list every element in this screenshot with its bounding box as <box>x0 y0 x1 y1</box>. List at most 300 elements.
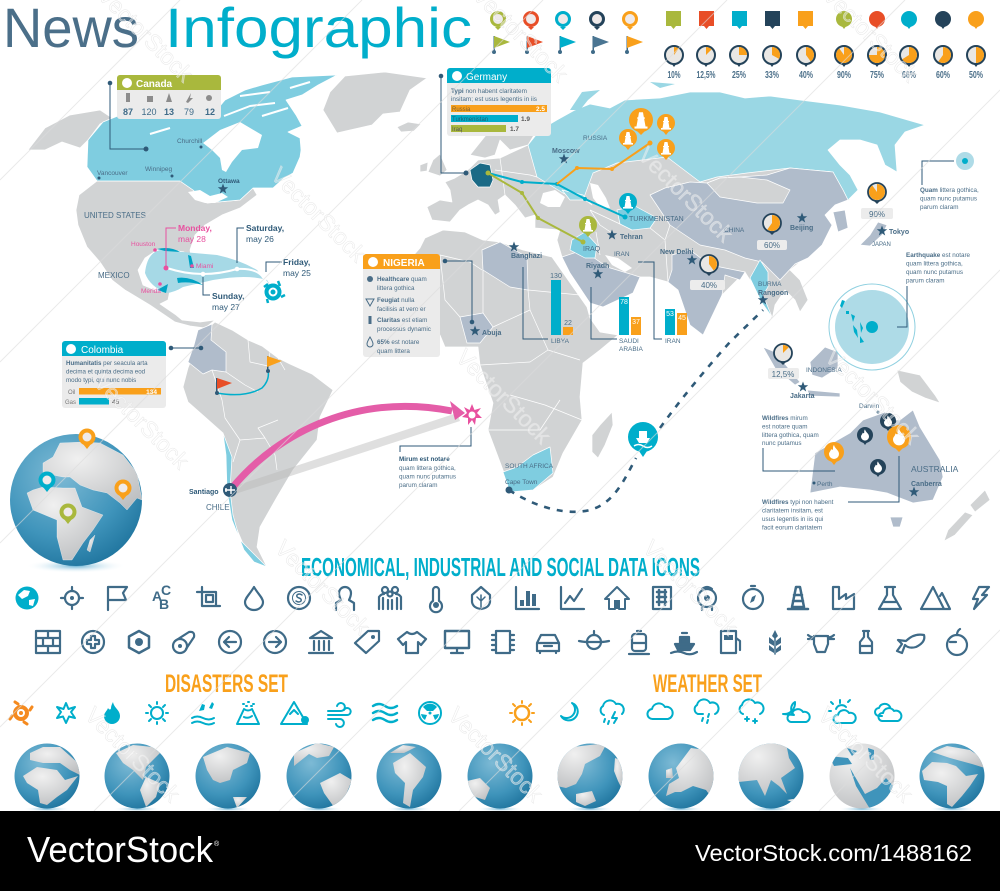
map labels: Rangoon <box>758 290 788 297</box>
Monday marker <box>164 223 212 270</box>
callout: wildfires south: usus legentis in iis qui <box>762 516 823 523</box>
callout: Canada <box>108 75 221 152</box>
icon: snow cloud <box>740 699 764 723</box>
wildfire markers <box>824 413 911 477</box>
callout: wildfires north: Wildfires mirum <box>762 415 808 422</box>
country: Iraq <box>570 232 597 258</box>
SE Asia islands <box>763 347 840 397</box>
callout: Mirum: parum claram <box>399 482 438 489</box>
icon: bank <box>309 631 333 653</box>
grey shadow <box>232 413 460 495</box>
earthquake zone <box>829 252 971 370</box>
icon: flask <box>879 587 901 609</box>
chart: Iran: 53 <box>666 311 674 318</box>
icon: house <box>605 587 629 609</box>
chart: Libya: 130 <box>550 273 562 280</box>
map labels: AUSTRALIA <box>911 464 959 474</box>
callout: Quam: Quam littera gothica, <box>920 187 979 194</box>
callout: Nigeria <box>363 254 474 357</box>
icon: rain cloud <box>695 699 719 723</box>
watermark: VectorStock <box>270 535 376 640</box>
pin 12.5 percent Sumatra: 12,5% <box>772 370 794 379</box>
percentage labels: 25% <box>732 70 746 81</box>
explosion star <box>462 404 482 425</box>
icon: apple <box>947 629 967 655</box>
map labels: Moscow <box>552 148 580 155</box>
icon: volcano <box>237 702 259 724</box>
country: Europe and Asia <box>427 130 850 335</box>
map labels: Tehran <box>620 234 643 241</box>
icon: flag <box>108 587 127 610</box>
callout: wildfires south <box>762 456 899 532</box>
Sunday marker: Sunday, <box>212 291 244 301</box>
heading: weather set: WEATHER SET <box>653 670 762 698</box>
icon: office building <box>653 587 671 609</box>
earthquake note: quam nunc putamus <box>906 269 963 276</box>
icon row 1 <box>16 582 989 612</box>
callout: wildfires south: claritatem insitam, est <box>762 508 823 514</box>
percentage labels: 75% <box>870 70 884 81</box>
chart: Saudi Arabia <box>591 287 644 353</box>
icon: letters <box>152 582 171 612</box>
chart: Saudi Arabia: 37 <box>632 319 640 326</box>
icon: price tag <box>355 631 379 653</box>
icon: fuel station <box>721 631 740 653</box>
map labels: UNITED STATES <box>84 211 146 220</box>
icon: two clouds <box>875 704 901 721</box>
globe row <box>14 743 985 812</box>
icon: pipe valve <box>579 631 609 649</box>
icon: letters: B <box>159 596 169 612</box>
icon: hex nut <box>129 631 149 653</box>
icon: lightning <box>973 587 989 609</box>
landmass: Greenland <box>323 72 427 133</box>
footer bar: ® <box>214 840 220 848</box>
hurricane icon <box>264 281 285 303</box>
callout: Quam: quam nunc putamus <box>920 196 977 202</box>
storm cities <box>131 241 213 295</box>
callout: wildfires south: facit eorum claritatem <box>762 524 822 532</box>
percentage labels: 40% <box>799 70 813 81</box>
callout: Germany: Germany <box>466 72 507 83</box>
callout: Germany: Russia <box>452 107 471 113</box>
icon: t-shirt <box>398 632 426 653</box>
percentage labels: 50% <box>969 70 983 81</box>
globe pin orange north <box>78 428 96 449</box>
globe: Central Americas <box>286 743 352 812</box>
callout: Nigeria: quam littera <box>377 348 410 355</box>
dashed sea route <box>506 310 763 512</box>
callout: wildfires north: est notare quam <box>762 424 808 430</box>
icon: crop <box>197 587 220 606</box>
icon: moon with cloud <box>783 702 810 722</box>
map labels: Tokyo <box>889 229 909 236</box>
pink arc <box>232 406 452 488</box>
icon: radiation <box>419 702 441 724</box>
Persian Gulf <box>605 255 632 272</box>
globe pin green <box>60 504 76 524</box>
callout: Canada: Canada <box>136 79 173 90</box>
Caspian Sea <box>590 183 610 208</box>
icon: storm cloud <box>601 700 624 724</box>
callout: Germany: Iraq <box>452 127 462 133</box>
country: Colombia <box>188 324 226 374</box>
callout: Canada: 79 <box>184 107 194 117</box>
callout: Mirum: Mirum est notare <box>399 456 450 463</box>
icon: thermometer <box>430 587 442 612</box>
globe: Africa <box>920 744 985 812</box>
globe: South America <box>376 744 442 812</box>
pipeline: Iraq <box>486 170 586 244</box>
callout: Germany: 1.9 <box>521 116 530 123</box>
icon: train <box>629 631 649 654</box>
icon: sun <box>510 701 534 725</box>
storm cities: Merida <box>141 288 161 295</box>
globe: Africa and Europe <box>14 744 80 812</box>
globe pin orange east <box>114 480 132 500</box>
chart: Libya: LIBYA <box>551 338 570 345</box>
country: Canada <box>87 75 337 203</box>
globe: Pacific <box>467 744 532 812</box>
Florida, Gulf coast, Yucatan and Cuba in cone <box>157 248 203 293</box>
chart: Iran: IRAN <box>665 338 681 345</box>
icon: person <box>336 587 354 610</box>
map labels: Beijing <box>790 225 813 232</box>
pin 60 percent China <box>757 214 787 250</box>
Madagascar <box>592 412 613 458</box>
callout: Germany: insitam; est usus legentis in iis <box>451 96 537 103</box>
percentage labels: 12,5% <box>696 70 716 81</box>
landmass: Iceland <box>397 122 421 132</box>
icon: microchip <box>492 631 514 653</box>
callout: wildfires south: Wildfires typi non habent <box>762 499 834 506</box>
callout: Nigeria: Healthcare quam <box>377 276 427 283</box>
earthquake note <box>906 252 971 284</box>
map labels: BURMA <box>758 281 782 288</box>
percentage labels: 66% <box>902 70 916 81</box>
map labels: Abuja <box>482 330 502 337</box>
borders Europe Africa Asia <box>440 158 670 430</box>
percentage labels <box>668 70 983 81</box>
watermark: VectorStock <box>451 344 557 449</box>
Friday marker <box>266 257 311 278</box>
globe: North and South America side <box>104 744 170 812</box>
globe pin blue <box>38 472 56 492</box>
icon: landslide <box>281 702 309 724</box>
icon row 2 <box>36 629 967 655</box>
icon: dollar coin <box>288 587 310 609</box>
icon: arrow left circle <box>219 631 241 653</box>
callout: Colombia: 134 <box>146 389 157 396</box>
New Guinea <box>897 370 940 403</box>
Monday marker: may 28 <box>178 234 206 244</box>
map labels: IRAN <box>614 251 630 258</box>
country: Burma <box>750 260 772 317</box>
icon: ship <box>671 633 697 654</box>
disaster icons <box>10 702 441 727</box>
UK and Ireland <box>420 154 447 176</box>
map labels: Santiago <box>189 489 219 496</box>
icon: bricks <box>36 631 60 653</box>
globe: North America <box>196 744 260 812</box>
pin 40 percent India: 40% <box>701 281 717 290</box>
chart: Saudi Arabia: SAUDI <box>619 338 639 345</box>
percentage labels: 33% <box>765 70 779 81</box>
round pins <box>836 11 984 29</box>
Scandinavia <box>470 120 540 158</box>
heading: data icons: ECONOMICAL, INDUSTRIAL AND SOCIAL DATA ICONS <box>301 552 700 582</box>
storm track <box>167 268 272 290</box>
Sunday marker: may 27 <box>212 302 240 312</box>
watermark: VectorStock <box>80 702 186 807</box>
globe: Asia Pacific <box>557 743 623 812</box>
callout: Colombia <box>62 341 203 408</box>
icon: globe <box>16 586 38 610</box>
map labels: MEXICO <box>98 271 130 280</box>
country: Chile <box>223 433 267 567</box>
pipeline: Turkmenistan <box>488 173 628 220</box>
country: Russia <box>528 92 925 200</box>
oil pins <box>579 108 675 237</box>
country: Nigeria <box>460 313 493 343</box>
icon: flood <box>192 702 214 724</box>
icon: wind <box>328 703 351 727</box>
Santiago plane icon <box>223 483 237 497</box>
percentage labels: 90% <box>837 70 851 81</box>
country: Australia <box>810 410 943 503</box>
Great Lakes <box>188 190 228 203</box>
flags <box>492 36 643 54</box>
red flag <box>215 378 232 395</box>
icon: car <box>537 635 559 653</box>
earthquake note: Earthquake est notare <box>906 252 971 259</box>
Saturday marker <box>235 223 284 271</box>
weather icons <box>510 699 901 725</box>
world map <box>28 72 990 567</box>
storm cone <box>145 250 273 293</box>
icon: flame <box>104 702 120 724</box>
Africa <box>400 230 618 492</box>
ship pin <box>628 422 658 457</box>
icon: piggy bank <box>698 587 716 610</box>
callout: Colombia: 45 <box>112 399 120 406</box>
callout: Germany: Typi non habent claritatem <box>451 88 527 95</box>
top right marker set <box>492 11 985 81</box>
callout: Nigeria: 65% est notare <box>377 339 420 346</box>
globe: South Asia <box>738 743 804 812</box>
pin 12.5 percent Sumatra <box>768 344 799 379</box>
map labels: Cape Town <box>505 479 538 486</box>
callout: Germany <box>439 68 551 176</box>
callout: Quam: parum claram <box>920 204 958 211</box>
country: Germany <box>470 163 493 187</box>
country: Saudi Arabia <box>562 250 640 307</box>
watermark: VectorStock <box>633 142 739 247</box>
callout: Nigeria: Claritas est etiam <box>377 317 427 324</box>
callout: Quam <box>920 152 979 211</box>
icon: water drop <box>245 587 263 610</box>
Saturday marker: may 26 <box>246 234 274 244</box>
callout: Canada: 120 <box>141 107 157 117</box>
map labels: TURKMENISTAN <box>629 216 684 223</box>
Hudson Bay <box>203 122 262 172</box>
landmass: Alaska <box>28 110 112 150</box>
chart: Iran <box>638 262 687 345</box>
map labels: Winnipeg <box>145 166 172 173</box>
callout: Nigeria: facilisis at vero er <box>377 306 426 313</box>
pipelines from Germany <box>486 140 652 244</box>
flight arrow to star <box>223 401 482 497</box>
icon: waves <box>373 704 397 722</box>
map labels <box>84 135 959 512</box>
ring pins <box>492 12 636 30</box>
country: South Africa <box>503 447 553 492</box>
Arctic islands <box>570 82 675 110</box>
earthquake note: quam littera gothica, <box>906 260 963 268</box>
callout: wildfires north: littera gothica, quam <box>762 432 819 439</box>
heading: disasters set: DISASTERS SET <box>165 670 288 698</box>
icon: line chart <box>561 587 584 609</box>
percentage pins <box>665 46 985 67</box>
callout: Nigeria: processus dynamic <box>377 326 431 333</box>
flags in South America <box>215 356 282 395</box>
callout: Canada: 87 <box>123 107 133 117</box>
footer bar: VectorStock <box>27 829 214 870</box>
watermark: VectorStock <box>820 344 926 449</box>
Black Sea <box>540 190 565 207</box>
map labels: INDONESIA <box>806 367 842 374</box>
icon: moon <box>561 703 578 720</box>
chart: Saudi Arabia: ARABIA <box>619 346 644 353</box>
callout: Canada: 12 <box>205 107 215 117</box>
country: India <box>668 250 745 335</box>
country: Korea and Japan <box>833 210 887 246</box>
icon: wheat <box>769 630 781 654</box>
Sunday marker <box>201 272 244 312</box>
pin 40 percent India <box>690 255 725 290</box>
Arctic channels <box>150 82 310 134</box>
map labels: Ottawa <box>218 178 240 185</box>
icon: family <box>379 587 401 609</box>
icon: target <box>61 587 83 609</box>
callout: Mirum: quam littera gothica, <box>399 465 456 472</box>
callout: wildfires north: nunc putamus <box>762 440 802 447</box>
icon: compass <box>743 586 763 609</box>
callout: wildfires north <box>762 415 835 471</box>
Saturday marker: Saturday, <box>246 223 284 233</box>
watermark: VectorStock <box>266 162 372 267</box>
icon: leaf <box>472 587 490 609</box>
map labels: Vancouver <box>97 170 128 177</box>
Monday marker: Monday, <box>178 223 212 233</box>
callout: Germany: Turkmenistan <box>452 117 488 123</box>
globe: Europe <box>648 744 714 812</box>
storm cities: Houston <box>131 241 156 248</box>
icon: explosion <box>57 703 75 723</box>
Southern Russia shaded part <box>562 190 592 205</box>
callout: Colombia: Oil <box>68 390 75 396</box>
map labels: IRAQ <box>583 246 601 253</box>
callout: Nigeria: littera gothica <box>377 285 415 292</box>
icon: sun with cloud <box>829 700 856 723</box>
Tasmania <box>890 517 903 527</box>
icon: bar chart <box>516 587 539 609</box>
map labels: RUSSIA <box>583 135 608 142</box>
orange flag <box>266 356 282 373</box>
pin 60 percent China: 60% <box>764 241 780 250</box>
percent pins on the map <box>690 183 893 379</box>
icon: factory <box>833 587 854 609</box>
title <box>3 0 472 59</box>
country: China <box>650 168 848 280</box>
icon: mountains <box>921 587 950 609</box>
country: Mongolia <box>707 177 790 203</box>
map labels: Perth <box>817 481 833 488</box>
callout: Colombia: modo typi, qui nunc nobis <box>66 377 136 384</box>
watermark: VectorStock <box>638 535 744 640</box>
chart: Iran: 45 <box>678 315 686 322</box>
icon: monitor <box>445 631 469 653</box>
callout: Mirum <box>399 427 471 489</box>
callout: Mirum: quam nunc putamus <box>399 474 456 480</box>
map labels: Jakarta <box>790 393 815 400</box>
New Zealand <box>944 490 990 541</box>
Friday marker: may 25 <box>283 268 311 278</box>
chart: Libya <box>523 267 573 345</box>
callout: Germany: 2.5 <box>536 106 545 113</box>
storm cities: Miami <box>196 263 213 270</box>
watermark: VectorStock <box>813 702 919 807</box>
large globe <box>10 428 142 573</box>
watermark: VectorStock <box>443 702 549 807</box>
callout: Canada: 13 <box>164 107 174 117</box>
icon: cloud <box>647 703 673 719</box>
country: United States and Mexico <box>76 181 257 328</box>
globe: Middle East <box>829 744 895 812</box>
icon: cow <box>808 635 834 652</box>
map labels: CHILE <box>206 503 230 512</box>
icon: medical cross <box>82 631 104 653</box>
icon: fish <box>897 635 924 653</box>
callout: Nigeria: Feugiat nulla <box>377 297 415 304</box>
callout: Germany: 1.7 <box>510 126 519 133</box>
pipeline: Russia <box>557 140 652 184</box>
chart: Saudi Arabia: 78 <box>620 299 628 306</box>
icon: letters: A <box>152 588 162 604</box>
map labels: Churchill <box>177 138 203 145</box>
map labels: Riyadh <box>586 263 609 270</box>
borders South America <box>212 340 285 470</box>
pin 90 percent Russia: 90% <box>869 210 885 219</box>
map labels: New Delhi <box>660 249 694 256</box>
map labels: Darwin <box>859 403 880 410</box>
percentage labels: 10% <box>668 70 681 81</box>
map labels: Canberra <box>911 481 942 488</box>
watermark: VectorStock <box>89 369 195 474</box>
country: South America <box>183 322 333 567</box>
chart: Libya: 22 <box>564 320 572 327</box>
footer bar <box>0 811 1000 891</box>
square pins <box>666 11 813 29</box>
bar charts <box>523 262 687 353</box>
icon: arrow right circle <box>264 631 286 653</box>
map labels: Banghazi <box>511 253 542 260</box>
pin 90 percent Russia <box>861 183 893 219</box>
Friday marker: Friday, <box>283 257 310 267</box>
icon: heat sun <box>146 702 168 724</box>
percentage labels: 60% <box>936 70 950 81</box>
country: Libya <box>482 242 528 290</box>
